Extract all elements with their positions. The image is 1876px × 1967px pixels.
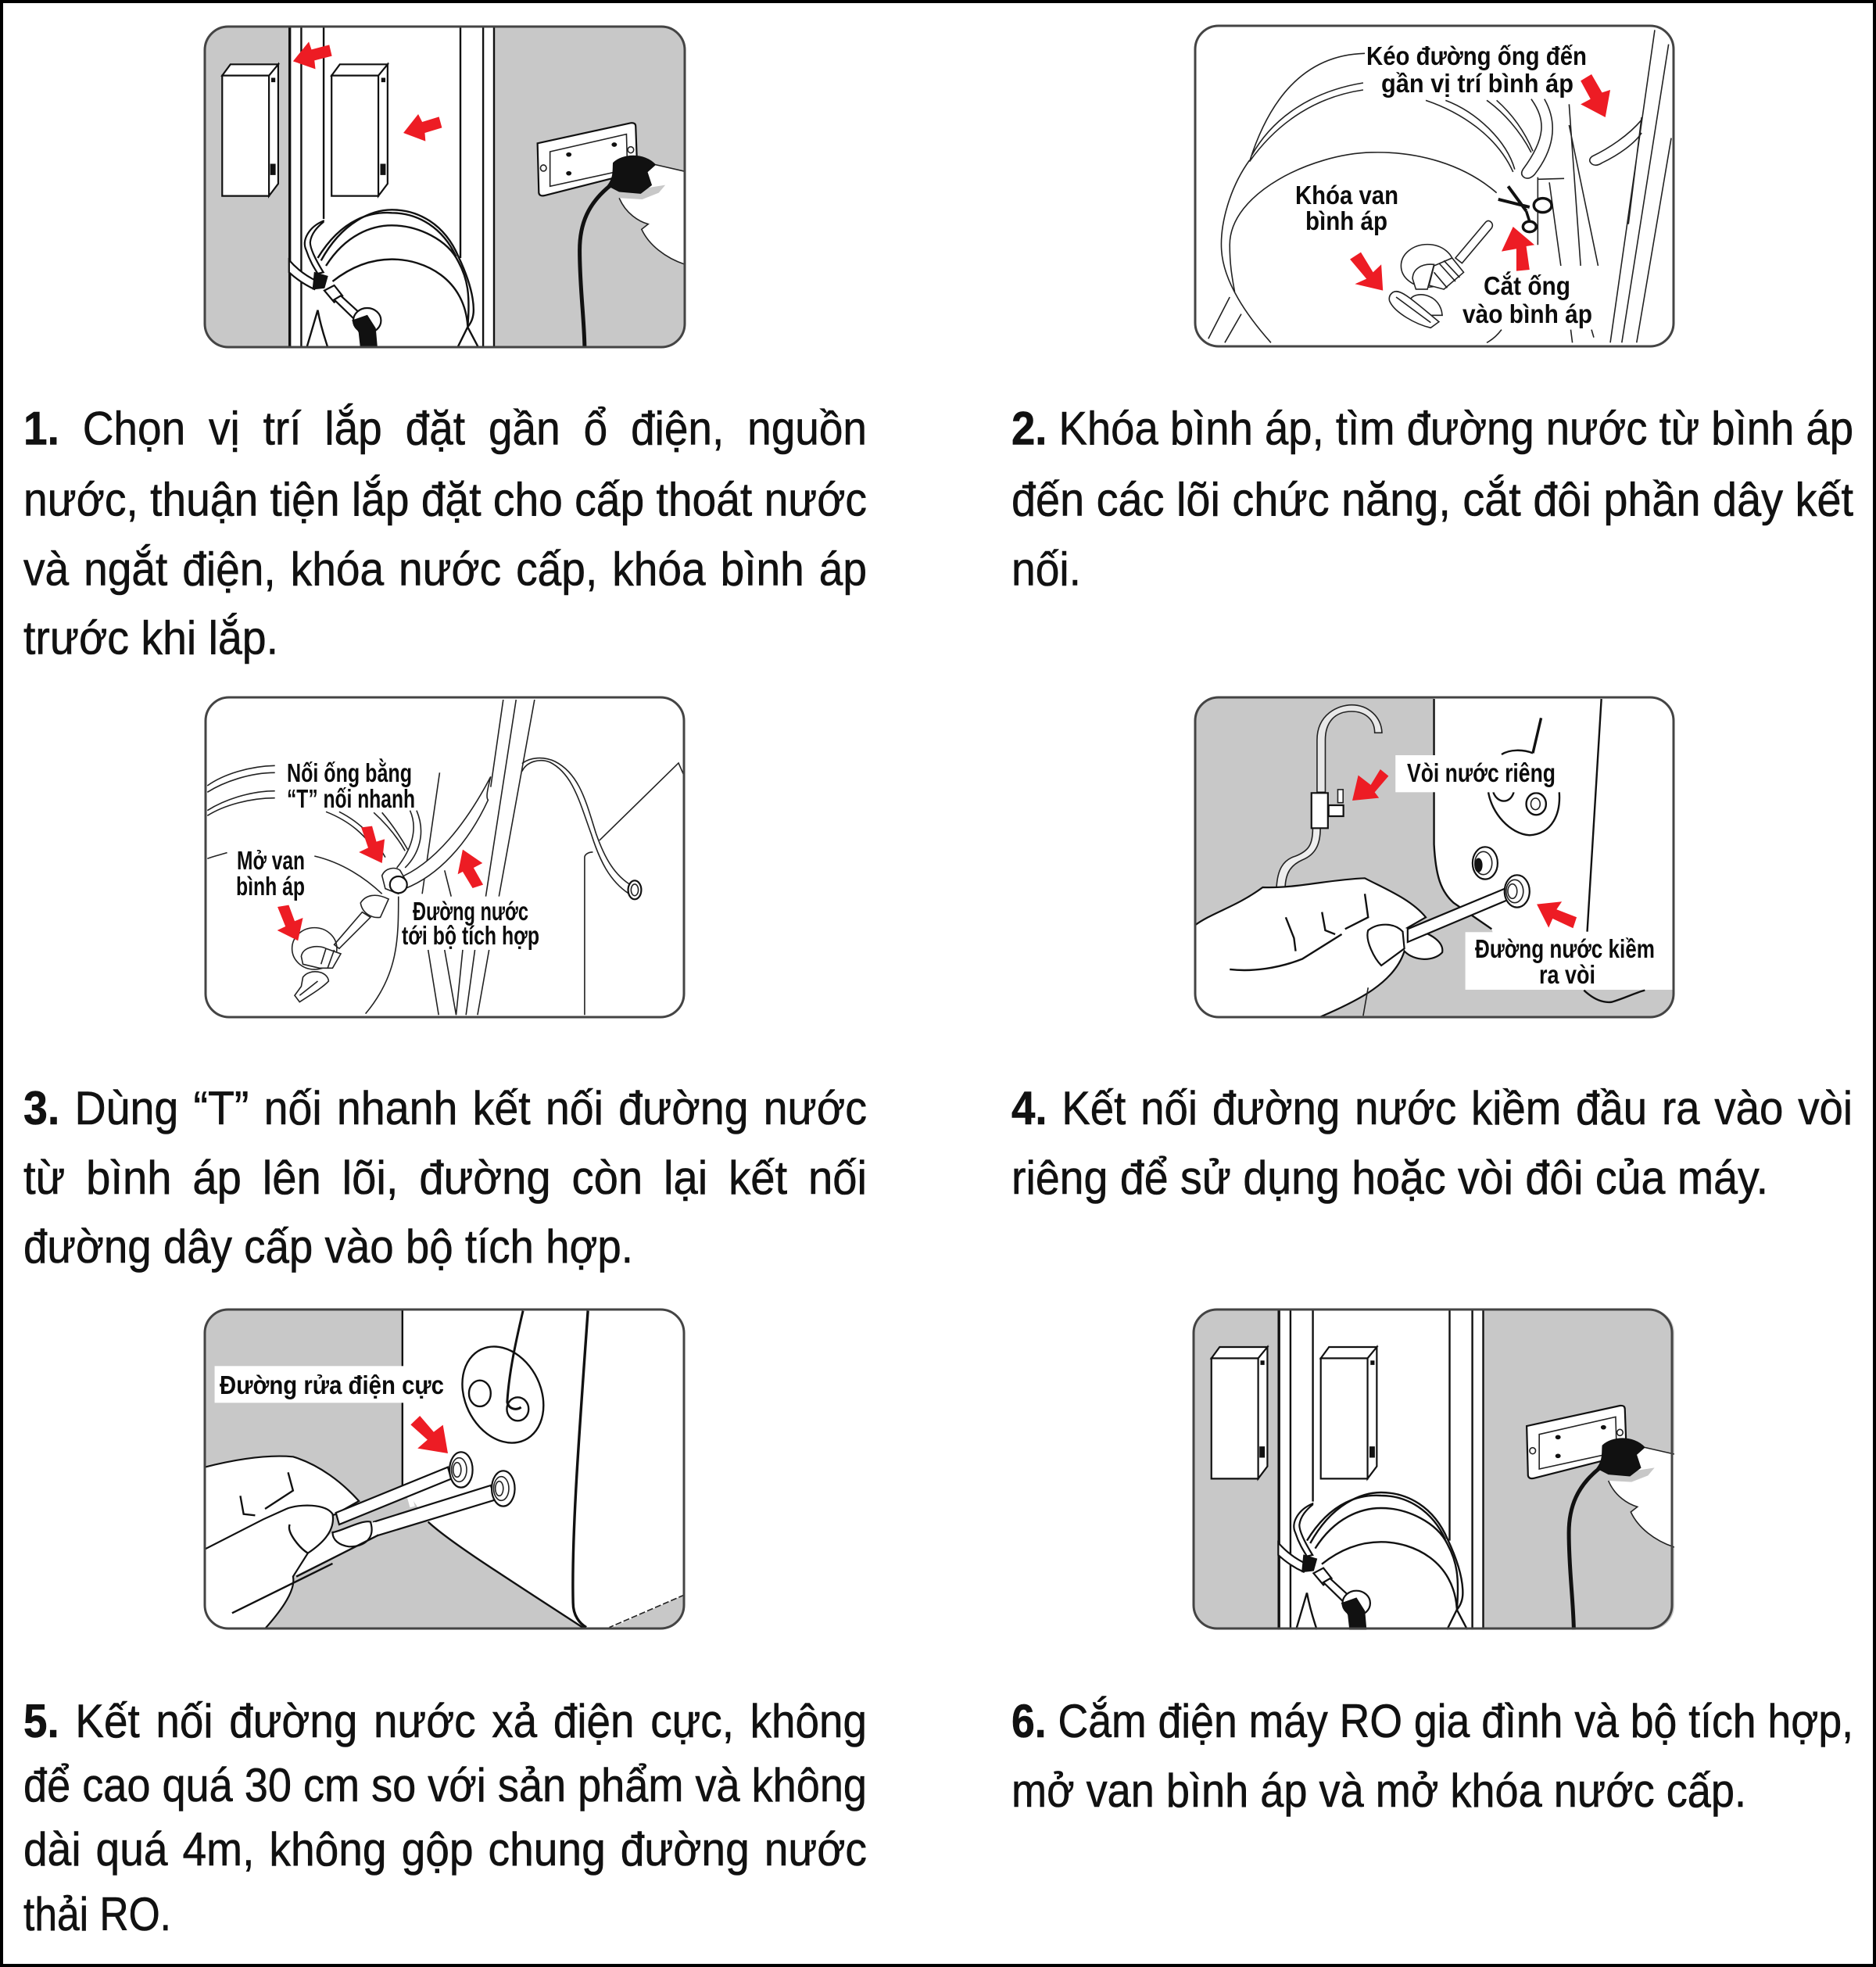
label: near the tank: gần vị trí bình áp (1381, 69, 1573, 98)
label: separate faucet: Vòi nước riêng (1407, 758, 1556, 787)
label: electrode flush line: Đường rửa điện cực (220, 1370, 444, 1399)
panel frame (205, 1310, 684, 1628)
panel: step 3 illustration (206, 697, 685, 1017)
label: quick T: “T” nối nhanh (287, 784, 415, 813)
label: connect with T: Nối ống bằng (287, 758, 412, 787)
text: step 5: thải RO. (23, 1888, 171, 1940)
label: alkaline line: Đường nước kiềm (1475, 934, 1655, 963)
label: to integrated unit: tới bộ tích hợp (402, 921, 539, 950)
text: step 1 (23, 402, 867, 665)
label: pull the pipe: Kéo đường ống đến (1366, 41, 1587, 70)
panel frame (206, 697, 684, 1017)
text: step 6 (1011, 1695, 1853, 1817)
text: step 5: dài quá 4m, không gộp chung đường nước (23, 1823, 867, 1876)
panel: step 2 illustration (1195, 26, 1674, 346)
label: open valve: Mở van (237, 846, 305, 875)
text: step 6: mở van bình áp và mở khóa nước cấp. (1011, 1765, 1746, 1817)
label: tank: bình áp (1305, 206, 1387, 235)
text: step 2 (1011, 402, 1853, 596)
drawing: filters, tank and wall socket (205, 27, 685, 347)
text: step 1: nước, thuận tiện lắp đặt cho cấp thoát nước (23, 474, 867, 525)
text: step 1: và ngắt điện, khóa nước cấp, khóa bình áp (23, 543, 867, 596)
label: to faucet: ra vòi (1539, 960, 1595, 989)
drawing: faucet and hand with alkaline line (1195, 697, 1674, 1017)
label: into tank: vào bình áp (1462, 299, 1592, 328)
text: step 3: từ bình áp lên lõi, đường còn lại kết nối (23, 1152, 867, 1204)
text: step 4 (1011, 1082, 1853, 1204)
text: step 2: nối. (1011, 543, 1081, 596)
label: tank: bình áp (236, 872, 305, 901)
panel: step 1 illustration (205, 27, 685, 347)
drawing: filters, tank and plugging into socket (1194, 1310, 1674, 1630)
panel: step 4 illustration (1195, 697, 1674, 1017)
text: step 3 (23, 1082, 867, 1273)
label: water line: Đường nước (413, 897, 528, 926)
text: step 3: 3. Dùng “T” nối nhanh kết nối đường nước (23, 1082, 867, 1134)
text: step 1: trước khi lắp. (23, 611, 278, 665)
text: step 4: riêng để sử dụng hoặc vòi đôi của máy. (1011, 1152, 1768, 1204)
panel: step 6 illustration (1194, 1310, 1674, 1630)
panel frame (1195, 697, 1674, 1017)
panel frame (1194, 1310, 1672, 1628)
text: step 3: đường dây cấp vào bộ tích hợp. (23, 1220, 633, 1273)
text: step 5: 5. Kết nối đường nước xả điện cực, không (23, 1695, 867, 1747)
panel frame (1195, 26, 1674, 346)
panel frame (205, 27, 685, 347)
drawing: hand with electrode flush lines (205, 1310, 685, 1628)
text: step 1: 1. Chọn vị trí lắp đặt gần ổ điện, nguồn (23, 402, 867, 455)
drawing: pressure tank, valve and scissors (1195, 26, 1674, 346)
text: step 5: để cao quá 30 cm so với sản phẩm và không (23, 1759, 867, 1811)
label: cut pipe: Cắt ống (1484, 271, 1570, 300)
label: lock valve: Khóa van (1295, 181, 1398, 210)
panel: step 5 illustration (205, 1310, 685, 1628)
text: step 5 (23, 1695, 867, 1940)
drawing: T connector and hose (206, 697, 685, 1017)
